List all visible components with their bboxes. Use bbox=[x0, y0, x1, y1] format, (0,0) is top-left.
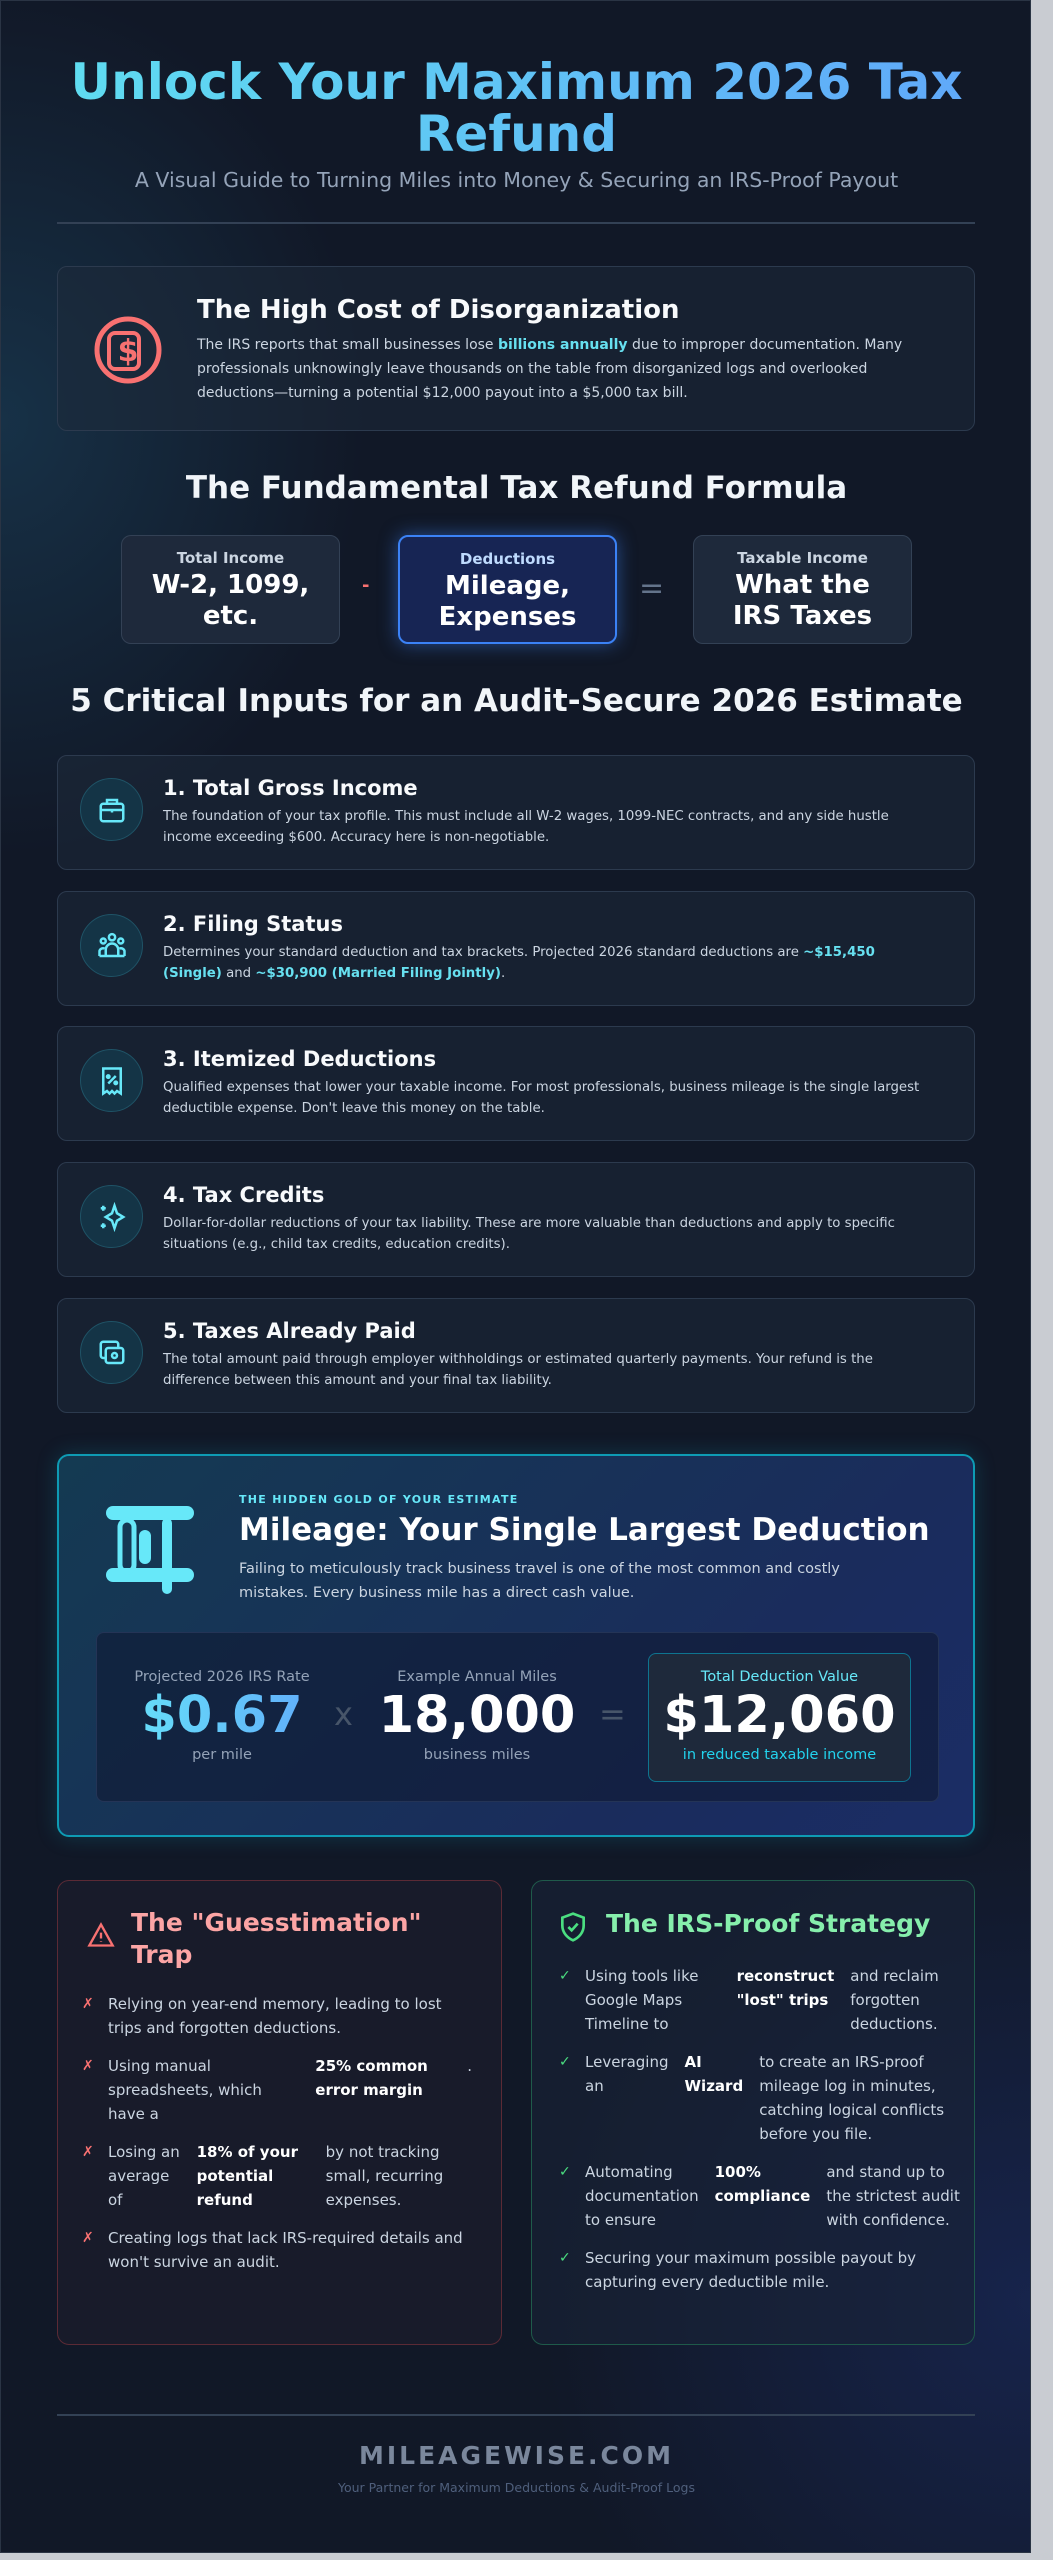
heading: formula: The Fundamental Tax Refund Formula bbox=[186, 470, 847, 506]
minus: - bbox=[362, 575, 369, 596]
box: total income: W-2, 1099, bbox=[152, 570, 309, 600]
icon: people bbox=[80, 914, 143, 977]
title: Refund bbox=[416, 105, 617, 163]
panel: input 1: The foundation of your tax profile. This must include all W-2 wages, 1099-NEC contracts, and any side hustle income exceeding $600. Accuracy here is non-negotiable. bbox=[163, 809, 889, 845]
result: in reduced taxable income bbox=[683, 1747, 876, 1763]
list: reconstruct "lost" trips bbox=[737, 1967, 834, 2009]
icon: dollar warning: $ bbox=[118, 334, 138, 369]
rate: $0.67 bbox=[141, 1686, 303, 1745]
panel: input 5: 5. Taxes Already Paid bbox=[163, 1319, 416, 1343]
panel: mileage bbox=[57, 1454, 975, 1837]
list bbox=[82, 1995, 472, 2271]
equals: = bbox=[639, 571, 664, 606]
footer brand: MILEAGEWISE.COM bbox=[359, 2441, 674, 2470]
subtitle: A Visual Guide to Turning Miles into Money & Securing an IRS-Proof Payout bbox=[135, 168, 898, 192]
box: total income: Total Income bbox=[177, 549, 284, 567]
panel: input 4 bbox=[57, 1162, 975, 1277]
panel: input 1 bbox=[57, 755, 975, 870]
heading: The "Guesstimation" bbox=[131, 1908, 422, 1937]
panel: input 3: 3. Itemized Deductions bbox=[163, 1047, 436, 1071]
list: ✗ bbox=[82, 2058, 94, 2074]
heading: Mileage: Your Single Largest Deduction bbox=[239, 1512, 930, 1548]
icon: money stack bbox=[80, 1321, 143, 1384]
list: Using manual spreadsheets, which have a . bbox=[108, 2057, 472, 2123]
panel: input 2: Determines your standard deduction and tax brackets. Projected 2026 standard deductions are ~$15,450 (Single) and ~$30,900 (Married Filing Jointly). bbox=[163, 945, 875, 981]
result: Total Deduction Value bbox=[701, 1669, 858, 1685]
description: Failing to meticulously track business travel is one of the most common and costly mistakes. Every business mile has a direct cash value. bbox=[239, 1561, 840, 1601]
panel: input 3 bbox=[57, 1026, 975, 1141]
box: taxable income: IRS Taxes bbox=[733, 601, 872, 631]
heading: critical inputs: 5 Critical Inputs for an Audit-Secure 2026 Estimate bbox=[70, 683, 963, 719]
rate: per mile bbox=[192, 1747, 252, 1763]
list: ✗ bbox=[82, 2230, 94, 2246]
title bbox=[1, 56, 1032, 160]
box: deductions bbox=[398, 535, 617, 644]
footer tagline: Your Partner for Maximum Deductions & Audit-Proof Logs bbox=[338, 2480, 695, 2495]
box: deductions: Mileage, bbox=[445, 571, 570, 601]
icon: road bbox=[106, 1506, 194, 1594]
heading: Trap bbox=[131, 1940, 192, 1969]
panel: high cost of disorganization bbox=[57, 266, 975, 431]
result: $12,060 bbox=[663, 1686, 896, 1745]
panel: input 4: 4. Tax Credits bbox=[163, 1183, 324, 1207]
equals: = bbox=[599, 1695, 626, 1733]
list: Securing your maximum possible payout by capturing every deductible mile. bbox=[585, 2249, 916, 2291]
panel: guesstimation trap bbox=[57, 1880, 502, 2345]
rate bbox=[134, 1669, 310, 1763]
box: total income: etc. bbox=[203, 601, 258, 631]
list: Automating documentation to ensure and stand up to the strictest audit with confidence. bbox=[585, 2163, 960, 2229]
list: Creating logs that lack IRS-required details and won't survive an audit. bbox=[108, 2229, 463, 2271]
miles bbox=[379, 1669, 575, 1763]
icon: sparkles bbox=[80, 1185, 143, 1248]
panel: input 1: 1. Total Gross Income bbox=[163, 776, 418, 800]
box: taxable income: Taxable Income bbox=[737, 549, 868, 567]
panel: input 5: The total amount paid through employer withholdings or estimated quarterly payments. Your refund is the difference between this amount and your final tax liability. bbox=[163, 1352, 873, 1388]
formula bbox=[121, 523, 912, 656]
box: taxable income bbox=[693, 535, 912, 644]
miles: business miles bbox=[424, 1747, 530, 1763]
box: deductions: Deductions bbox=[460, 550, 555, 568]
panel: IRS-proof strategy bbox=[531, 1880, 975, 2345]
icon: dollar warning bbox=[94, 316, 162, 384]
list: ✓ bbox=[559, 2250, 571, 2266]
panel: input 5 bbox=[57, 1298, 975, 1413]
box: total income bbox=[121, 535, 340, 644]
heading: The IRS-Proof Strategy bbox=[606, 1909, 930, 1938]
miles: 18,000 bbox=[379, 1686, 575, 1745]
panel: input 4: Dollar-for-dollar reductions of your tax liability. These are more valuable than deductions and apply to specific situations (e.g., child tax credits, education credits). bbox=[163, 1216, 895, 1252]
panel: input 3: Qualified expenses that lower your taxable income. For most professionals, business mileage is the single largest deductible expense. Don't leave this money on the table. bbox=[163, 1080, 919, 1116]
rate: Projected 2026 IRS Rate bbox=[134, 1669, 310, 1685]
list: ✓ bbox=[559, 2054, 571, 2070]
heading bbox=[131, 1908, 422, 1969]
list bbox=[559, 1967, 960, 2291]
calculation bbox=[96, 1632, 939, 1802]
title: Unlock Your Maximum 2026 Tax bbox=[71, 53, 962, 111]
box: taxable income: What the bbox=[735, 570, 870, 600]
panel: input 2: 2. Filing Status bbox=[163, 912, 343, 936]
label: THE HIDDEN GOLD OF YOUR ESTIMATE bbox=[239, 1493, 519, 1506]
heading: The High Cost of Disorganization bbox=[197, 295, 680, 325]
list: ✗ bbox=[82, 2144, 94, 2160]
panel: input 2 bbox=[57, 891, 975, 1006]
icon: briefcase bbox=[80, 778, 143, 841]
miles: Example Annual Miles bbox=[397, 1669, 557, 1685]
list: ✗ bbox=[82, 1996, 94, 2012]
list: Losing an average of by not tracking small, recurring expenses. bbox=[108, 2143, 443, 2209]
list: 25% common error margin bbox=[315, 2057, 428, 2099]
icon: shield bbox=[561, 1912, 585, 1942]
list: ✓ bbox=[559, 2164, 571, 2180]
list: 18% of your potential refund bbox=[197, 2143, 298, 2209]
list: Using tools like Google Maps Timeline to and reclaim forgotten deductions. bbox=[585, 1967, 939, 2033]
result bbox=[648, 1653, 911, 1782]
list: 100% compliance bbox=[715, 2163, 810, 2205]
times: x bbox=[334, 1695, 353, 1733]
body text: The IRS reports that small businesses lose billions annually due to improper documentation. Many professionals unknowingly leave thousands on the table from disorganized logs and overlooked deductions—turning a potential $12,000 payout into a $5,000 tax bill. bbox=[197, 337, 902, 401]
box: deductions: Expenses bbox=[439, 602, 576, 632]
list: AI Wizard bbox=[685, 2053, 743, 2095]
icon: receipt bbox=[80, 1049, 143, 1112]
list: Relying on year-end memory, leading to lost trips and forgotten deductions. bbox=[108, 1995, 442, 2037]
icon: warning bbox=[87, 1922, 115, 1947]
list: Leveraging an to create an IRS-proof mileage log in minutes, catching logical conflicts before you file. bbox=[585, 2053, 944, 2143]
list: ✓ bbox=[559, 1968, 571, 1984]
